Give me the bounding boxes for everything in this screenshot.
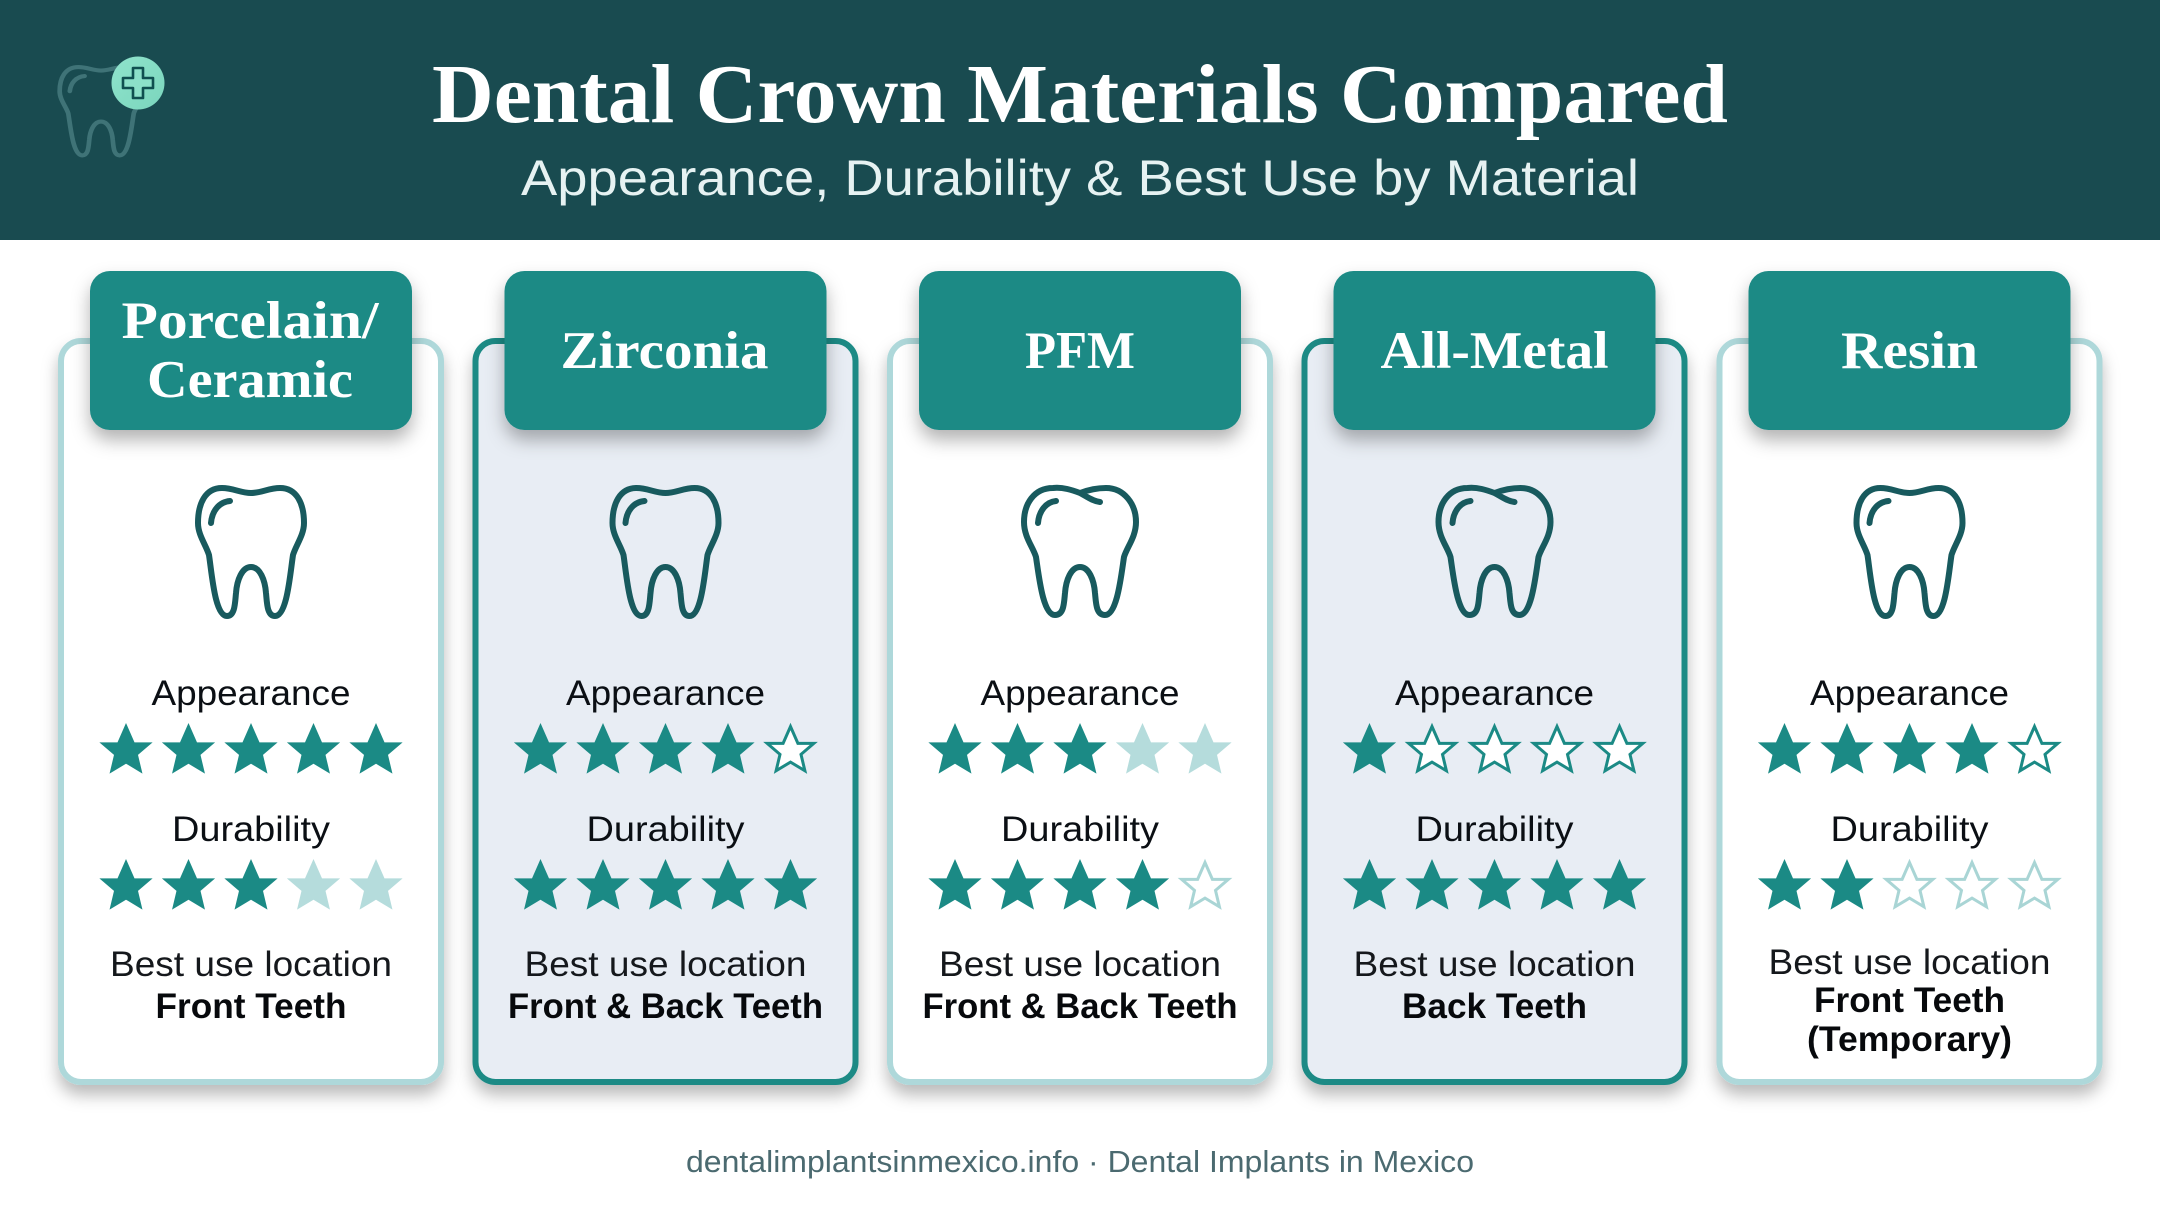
panel: Porcelain/Ceramic [61, 271, 441, 1082]
label: Durability: Durability [586, 810, 745, 849]
label: best use location: Best use location [1768, 943, 2050, 982]
label: Durability: Durability [172, 810, 331, 849]
heading: Porcelain/Ceramic: Porcelain/ [122, 292, 380, 350]
heading: All-Metal [1334, 271, 1656, 430]
stars: durability 4 of 5 [928, 859, 1228, 910]
heading: All-Metal: All-Metal [1380, 322, 1608, 380]
label: Appearance: Appearance [1810, 674, 2009, 713]
footer: dentalimplantsinmexico.info · Dental Implants in Mexico [686, 1144, 1474, 1179]
label: Appearance: Appearance [980, 674, 1180, 713]
panel: Zirconia [476, 271, 856, 1082]
label: Durability: Durability [1830, 810, 1989, 849]
icon: tooth with plus badge [60, 56, 164, 155]
subtitle: Appearance, Durability & Best Use by Material [521, 150, 1639, 206]
stars: appearance 4 of 5 [514, 723, 814, 774]
icon: tooth with fold [1438, 488, 1550, 615]
stars: appearance 4 of 5 [1758, 723, 2058, 774]
label: Durability: Durability [1415, 810, 1574, 849]
icon: tooth with fold [1024, 488, 1136, 615]
panel: PFM [890, 271, 1270, 1082]
heading: Zirconia: Zirconia [560, 322, 769, 380]
value: Front Teeth: Front Teeth [156, 987, 346, 1026]
stars: appearance 5 of 5 [99, 723, 403, 774]
value: Back Teeth: Back Teeth [1402, 987, 1587, 1026]
value: Front Teeth (Temporary): (Temporary) [1807, 1020, 2012, 1059]
header banner [0, 0, 2160, 240]
label: best use location: Best use location [110, 945, 392, 984]
stars: appearance 3 of 5 [928, 723, 1232, 774]
value: Front & Back Teeth: Front & Back Teeth [922, 987, 1238, 1026]
stars: durability 5 of 5 [514, 859, 817, 910]
label: best use location: Best use location [524, 945, 806, 984]
label: Durability: Durability [1001, 810, 1160, 849]
stars: durability 5 of 5 [1343, 859, 1646, 910]
panel: All-Metal [1304, 271, 1684, 1082]
label: Appearance: Appearance [566, 674, 765, 713]
heading: Porcelain/Ceramic [90, 271, 412, 430]
label: best use location: Best use location [1354, 945, 1636, 984]
label: best use location: Best use location [939, 945, 1221, 984]
heading: Porcelain/Ceramic: Ceramic [147, 351, 353, 409]
icon: tooth [1856, 488, 1962, 616]
heading: Zirconia [504, 271, 826, 430]
heading: Resin [1748, 271, 2070, 430]
stars: durability 2 of 5 [1758, 859, 2058, 910]
icon: tooth [612, 488, 718, 616]
stars: appearance 1 of 5 [1343, 723, 1643, 774]
heading: PFM [919, 271, 1241, 430]
title: Dental Crown Materials Compared [432, 48, 1728, 141]
value: Front Teeth (Temporary): Front Teeth [1814, 981, 2005, 1020]
value: Front Teeth (Temporary) [1807, 981, 2012, 1059]
heading: Resin: Resin [1841, 322, 1978, 380]
stars: durability 3 of 5 [99, 859, 403, 910]
panel: Resin [1720, 271, 2100, 1082]
label: Appearance: Appearance [1395, 674, 1594, 713]
label: Appearance: Appearance [152, 674, 350, 713]
value: Front & Back Teeth: Front & Back Teeth [508, 987, 823, 1026]
icon: tooth [198, 488, 304, 616]
heading: PFM: PFM [1025, 322, 1135, 380]
